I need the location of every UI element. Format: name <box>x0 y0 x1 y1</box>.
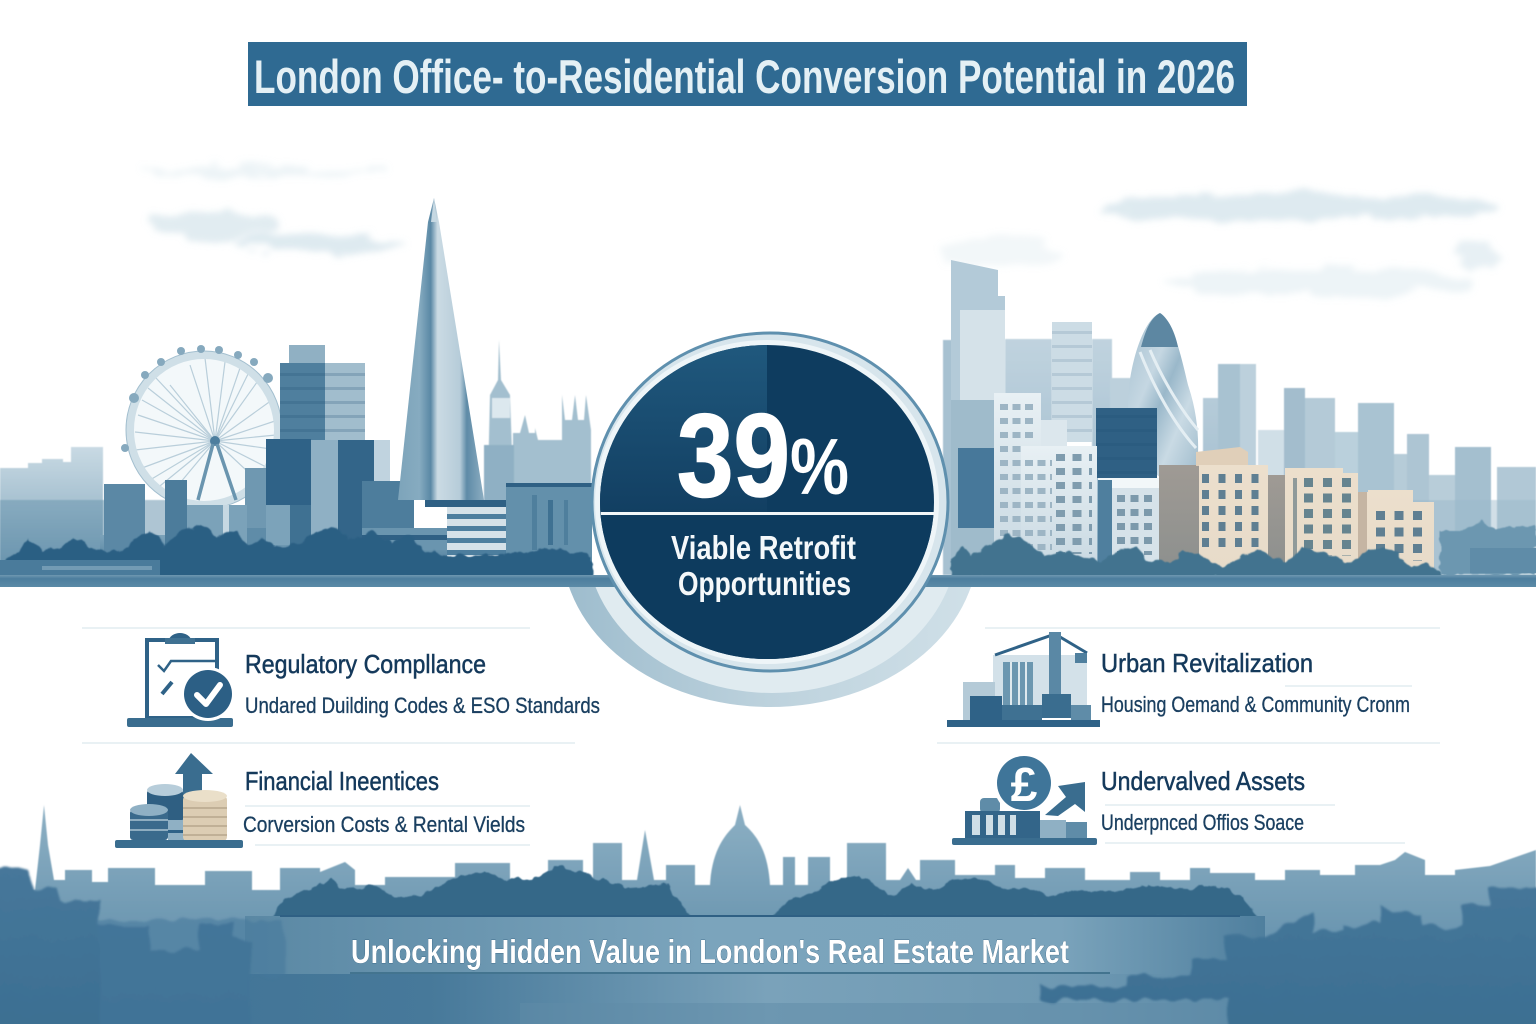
icon: pound coin, building and arrow <box>952 755 1097 845</box>
item: Undervalued Assets <box>952 755 1305 845</box>
foreground right mass <box>1040 888 1536 1024</box>
icon: London Eye <box>121 345 282 509</box>
The Shard <box>398 198 484 500</box>
item heading: Regulatory Compllance <box>245 649 486 679</box>
central statistic medallion <box>562 333 978 707</box>
front dark blocks <box>104 439 448 555</box>
tree line left <box>0 526 592 578</box>
item heading: Undervalved Assets <box>1101 766 1305 796</box>
item: Urban Revitalization <box>947 632 1410 727</box>
item heading: Urban Revitalization <box>1101 648 1313 678</box>
Big Ben and Parliament <box>484 340 591 505</box>
title banner: London Office- to-Residential Conversion Potential in 2026 <box>254 50 1235 103</box>
item subtext: Underpnced Offios Soace <box>1101 810 1304 835</box>
striped tall tower <box>951 260 1092 570</box>
medallion divider <box>601 512 934 515</box>
skyline ground band <box>0 575 1536 587</box>
stat caption <box>671 529 856 602</box>
stat percent sign: % <box>790 422 849 511</box>
icon: pound coin, building and arrow: £ <box>1011 759 1038 812</box>
distant buildings right <box>943 339 1536 575</box>
low office blocks <box>362 483 592 575</box>
icon: building and crane <box>947 632 1100 727</box>
footer tagline: Unlocking Hidden Value in London's Real Estate Market <box>351 933 1069 970</box>
item heading: Financial Ineentices <box>245 766 439 796</box>
icon: coins and arrow <box>115 753 243 848</box>
left skyline illustration <box>0 198 592 579</box>
right skyline illustration <box>943 260 1536 578</box>
footer panel background <box>245 916 1265 974</box>
medallion disc <box>595 340 945 665</box>
tree line right <box>950 534 1440 578</box>
distant skyline with St Paul's dome <box>0 805 1536 1024</box>
section divider lines <box>82 628 1440 845</box>
distant haze buildings left <box>0 447 103 579</box>
bottom skyline and footer panel <box>0 805 1536 1024</box>
medallion ring <box>592 333 948 671</box>
tree band <box>270 866 1260 918</box>
glass dark blocks <box>958 408 1157 528</box>
beige converted residential blocks <box>1159 447 1434 570</box>
item: Regulatory Compliance <box>127 633 600 727</box>
sky clouds <box>140 167 1504 296</box>
item: Financial Incentives <box>115 753 525 848</box>
foreground left mass <box>0 870 285 1024</box>
tower block behind <box>280 345 365 443</box>
white residential blocks <box>994 393 1159 566</box>
medallion crescent shadow <box>569 587 971 707</box>
item subtext: Undared Duilding Codes & ESO Standards <box>245 693 600 718</box>
title banner <box>248 42 1247 106</box>
The Gherkin <box>1128 313 1198 480</box>
item subtext: Housing Oemand & Community Cronm <box>1101 692 1410 717</box>
icon: clipboard with check <box>127 633 235 727</box>
stat caption: Opportunities <box>678 565 851 602</box>
stat value: 39%: 39 <box>677 390 790 522</box>
item subtext: Corversion Costs & Rental Vields <box>243 812 525 837</box>
stat caption: Viable Retrofit <box>671 529 856 566</box>
